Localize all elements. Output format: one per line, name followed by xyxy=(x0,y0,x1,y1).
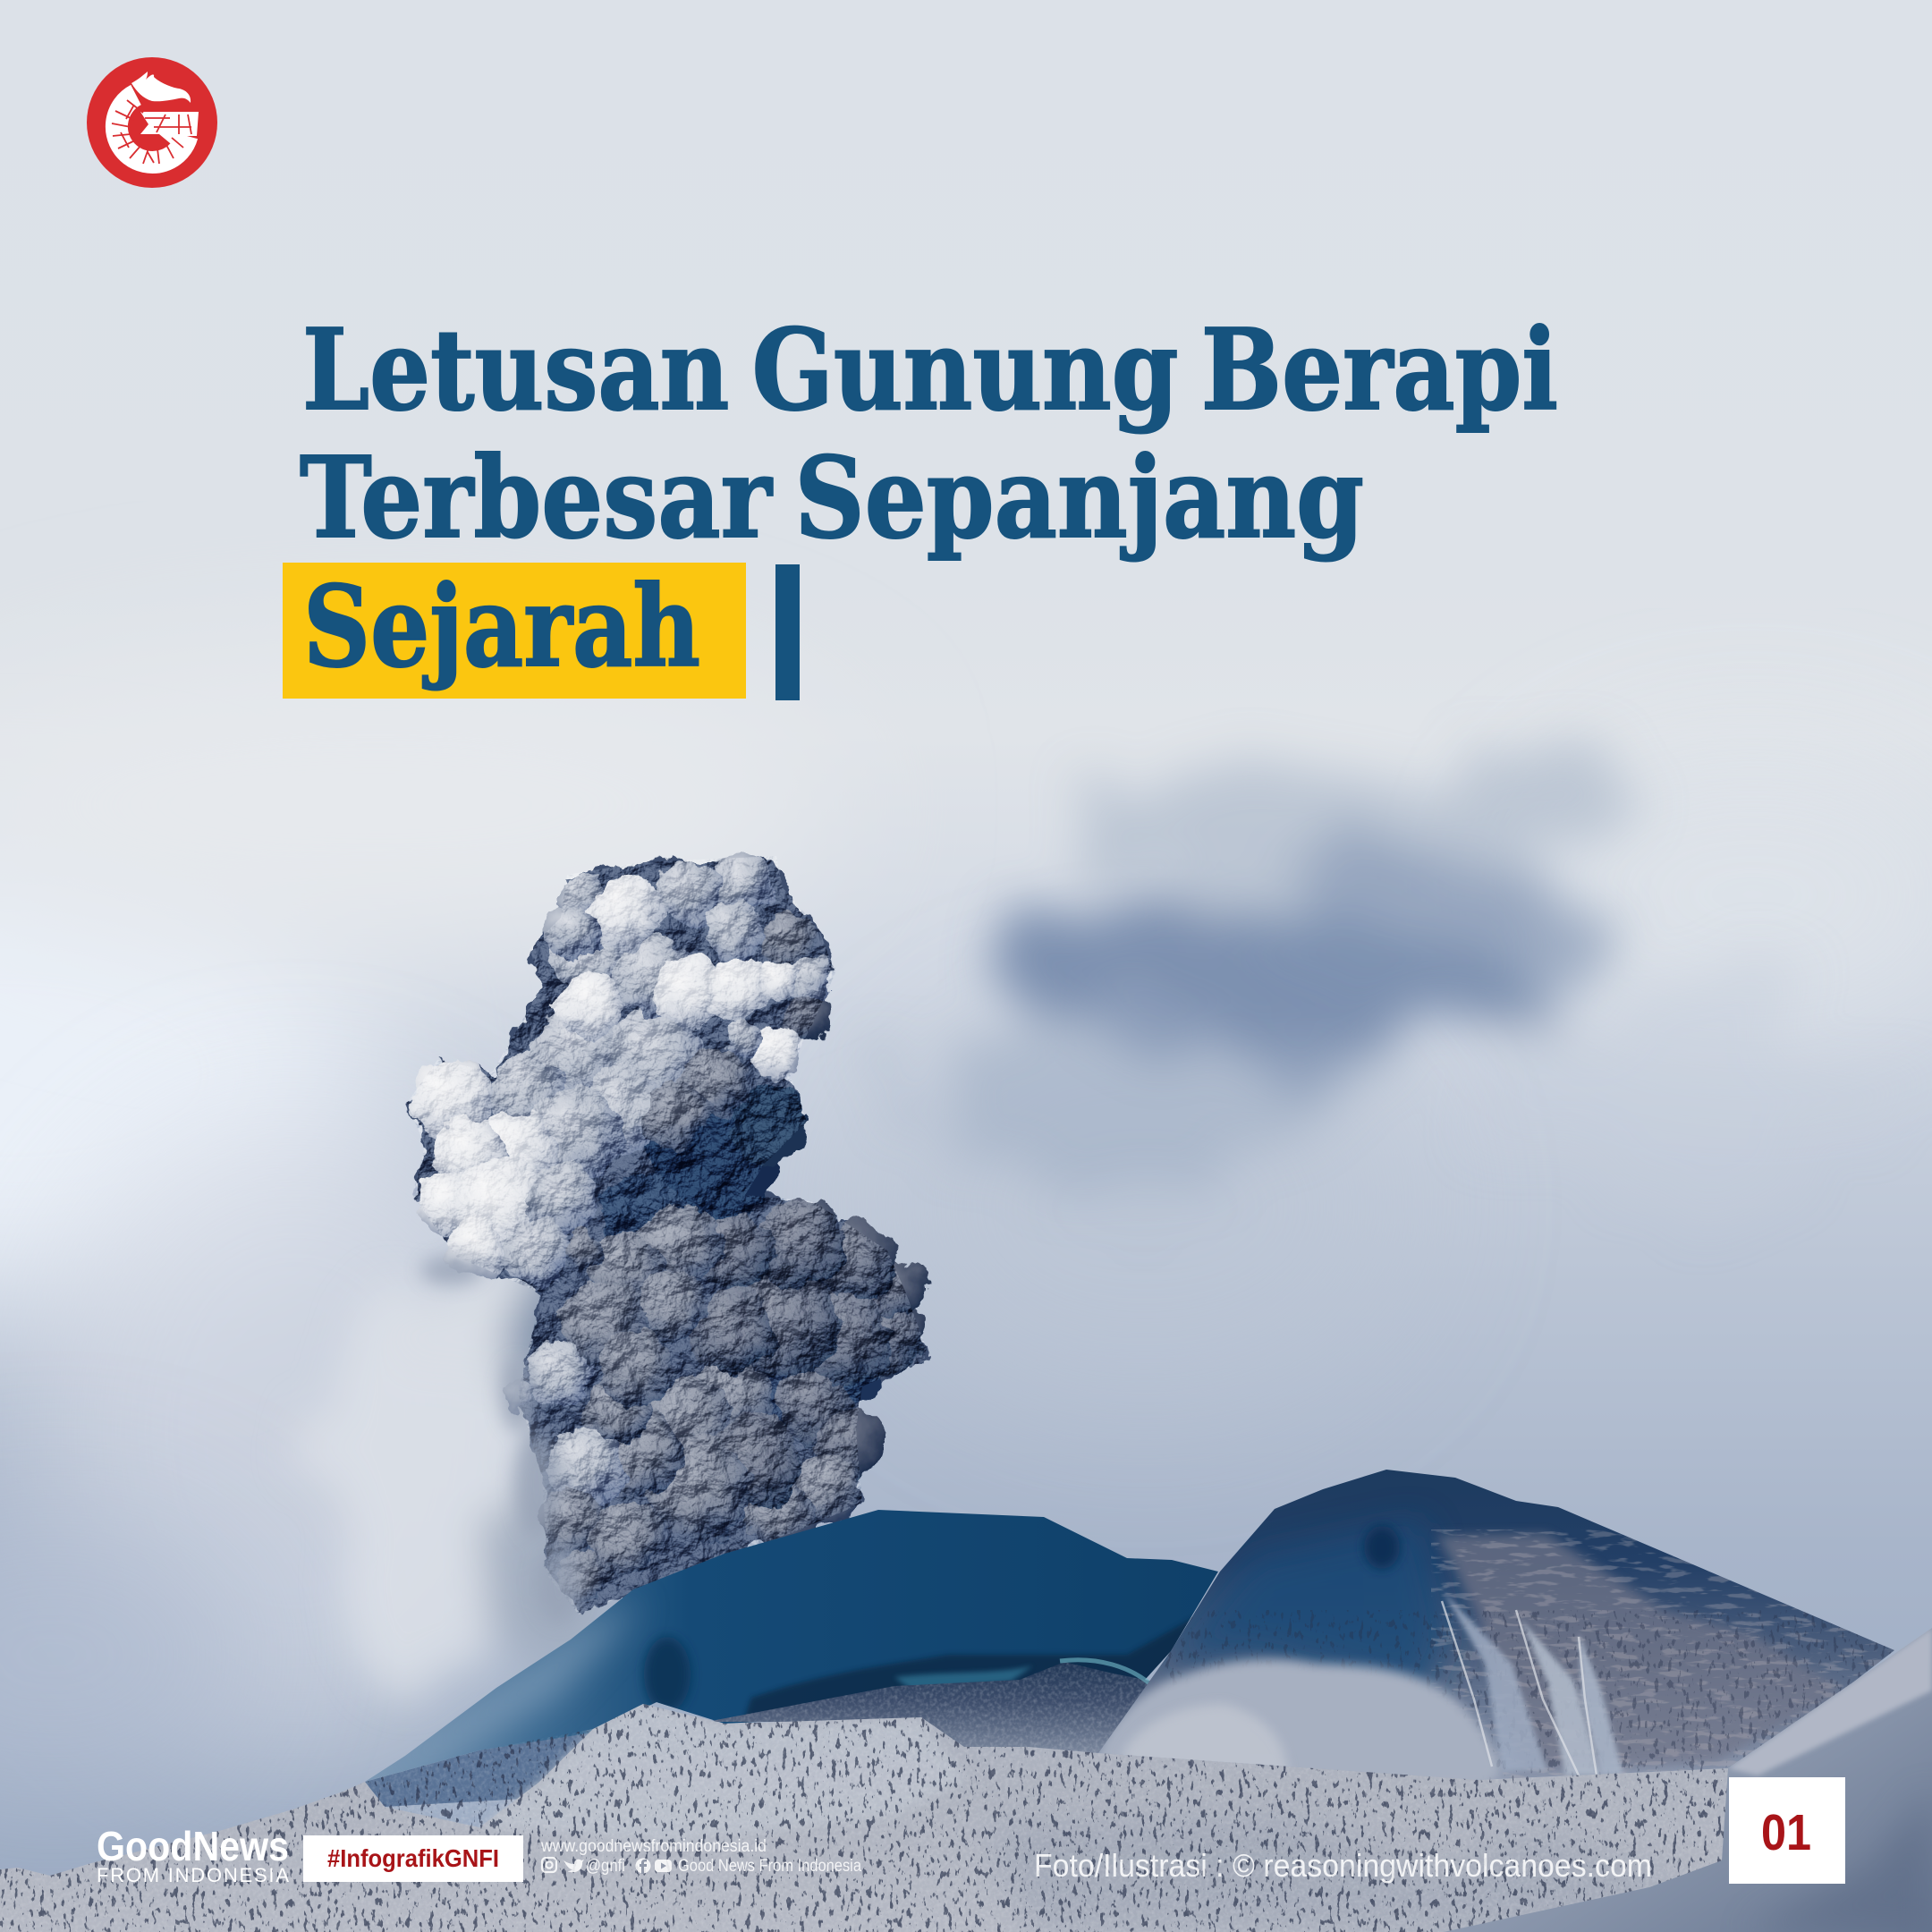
dark rock band under the crater xyxy=(712,1657,1150,1753)
footer: hashtag box xyxy=(303,1835,523,1882)
title line 2: Terbesar Sepanjang xyxy=(300,433,1364,564)
title line 3: Sejarah xyxy=(303,562,700,692)
icon: instagram xyxy=(542,1858,556,1872)
soft steam drifting left of the plume xyxy=(313,1261,635,1690)
photo credit: Foto/Ilustrasi : © reasoningwithvolcanoes.com xyxy=(1034,1847,1652,1884)
left volcano cone xyxy=(365,1510,1218,1782)
ash covered foreground ground xyxy=(0,1628,1932,1932)
eruption ash plume xyxy=(340,787,984,1646)
dark ash cloud in the sky xyxy=(894,742,1914,1199)
right volcano peak xyxy=(1098,1470,1905,1789)
blue vertical bar xyxy=(775,564,800,700)
page number box: 01 xyxy=(1761,1804,1811,1861)
footer: website and social handles: Good News From Indonesia xyxy=(678,1857,861,1876)
footer: website and social handles xyxy=(540,1837,861,1876)
ash-covered foothill behind the ground xyxy=(365,1729,593,1807)
footer: hashtag box: #InfografikGNFI xyxy=(327,1844,499,1872)
footer: GoodNews From Indonesia wordmark xyxy=(97,1823,289,1886)
page number box xyxy=(1729,1777,1845,1884)
title block xyxy=(283,305,1558,700)
footer: website and social handles: @gnfi xyxy=(586,1857,625,1876)
logo: white G ring with batik pattern xyxy=(112,95,199,164)
yellow highlight box xyxy=(283,563,746,699)
icon: youtube xyxy=(655,1860,672,1872)
footer: website and social handles: www.goodnewsfromindonesia.id xyxy=(540,1837,767,1856)
logo: eagle head xyxy=(131,72,191,103)
logo: GNFI red eagle badge xyxy=(87,57,217,188)
footer: GoodNews From Indonesia wordmark: GoodNews xyxy=(97,1823,289,1869)
title line 1: Letusan Gunung Berapi xyxy=(302,305,1558,436)
footer: GoodNews From Indonesia wordmark: FROM INDONESIA xyxy=(97,1864,289,1886)
icon: twitter xyxy=(564,1860,584,1872)
icon: facebook xyxy=(635,1859,651,1874)
